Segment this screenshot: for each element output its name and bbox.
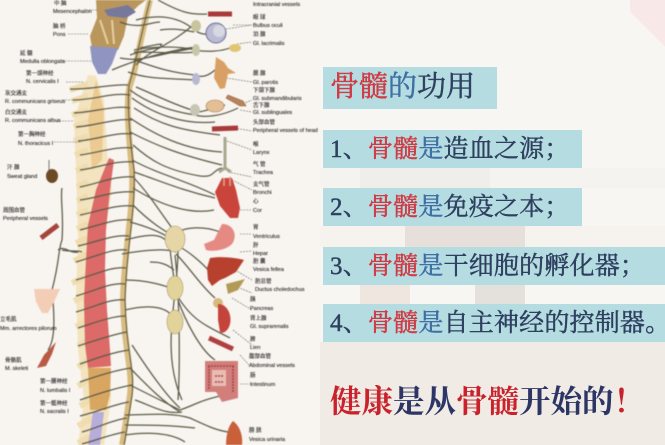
- right anatomical labels: 泪 腺: [253, 30, 266, 38]
- right anatomical labels: 头部血管: [253, 118, 276, 126]
- icon: eyeball: [191, 20, 226, 43]
- right anatomical labels: Vesica urinaria: [249, 437, 286, 443]
- left anatomical labels: R. communicans griseus: [5, 99, 65, 105]
- left anatomical labels: Sweat gland: [7, 174, 37, 180]
- right anatomical labels: 肾上腺: [250, 314, 267, 322]
- right anatomical labels: Ventriculus: [253, 234, 280, 240]
- icon: intracranial vessel: [208, 12, 232, 16]
- right anatomical labels: Cor: [253, 208, 262, 214]
- icon: larynx and trachea: [219, 137, 231, 172]
- right anatomical labels: Trachea: [253, 170, 274, 176]
- icon: peripheral vessel: [41, 225, 58, 238]
- heading: functions of bone marrow: 骨髓的功用: [330, 71, 475, 103]
- sympathetic chain: [122, 0, 150, 445]
- icon: ganglion: [167, 310, 183, 334]
- anatomical diagram: spinal cord and autonomic nerves: [0, 0, 318, 445]
- right anatomical labels: Intracranial vessels: [253, 2, 300, 8]
- right anatomical labels: 胃: [253, 224, 259, 231]
- right anatomical labels: Gl. submandibularis: [253, 96, 302, 102]
- heading: functions of bone marrow: [323, 67, 497, 109]
- right anatomical labels: Gl. sublinguales: [253, 110, 292, 116]
- right anatomical labels: Bulbus oculi: [253, 23, 283, 29]
- right anatomical labels: 喉: [253, 140, 259, 148]
- list item 3: [323, 247, 665, 285]
- list item 3: 3、骨髓是干细胞的孵化器；: [330, 253, 645, 280]
- icon: ganglion: [167, 276, 183, 300]
- icon: sweat gland: [46, 160, 58, 183]
- right anatomical labels: 肝: [253, 242, 259, 249]
- right anatomical labels: 眼 球: [253, 13, 266, 21]
- left anatomical labels: 第一腰神经: [40, 377, 68, 385]
- left anatomical labels: 白交通支: [5, 108, 28, 116]
- left anatomical labels: R. communicans albus: [5, 118, 61, 124]
- list item 4: 4、骨髓是自主神经的控制器。: [330, 310, 665, 337]
- icon: heart: [215, 177, 240, 218]
- right anatomical labels: 下颌下腺: [253, 86, 276, 94]
- brainstem: [90, 0, 146, 74]
- icon: salivary glands: [190, 95, 246, 116]
- list item 4: [323, 304, 665, 342]
- right anatomical labels: 舌下腺: [253, 101, 270, 109]
- list item 2: 2、骨髓是免疫之本；: [330, 194, 570, 221]
- spinal cord: lower tan segment: [88, 368, 111, 410]
- list item 1: [323, 130, 582, 168]
- left anatomical labels: N. cervicalis I: [26, 79, 59, 85]
- left anatomical labels: 第一骶神经: [40, 399, 68, 407]
- left anatomical labels: Mesencephalon: [53, 9, 92, 15]
- right anatomical labels: [249, 2, 318, 443]
- right anatomical labels: 心: [253, 198, 259, 205]
- right anatomical labels: Abdominal vessels: [249, 363, 295, 369]
- right anatomical labels: Larynx: [253, 150, 270, 156]
- icon: celiac ganglion: [165, 226, 185, 252]
- right anatomical labels: Lien: [250, 345, 260, 351]
- left anatomical labels: 汗 腺: [7, 163, 20, 171]
- left anatomical labels: 周围血管: [3, 206, 26, 214]
- right anatomical labels: 膀 胱: [249, 426, 262, 434]
- left anatomical labels: 第一颈神经: [26, 69, 54, 77]
- left anatomical labels: 第一胸神经: [18, 130, 46, 138]
- icon: head vessels: [212, 128, 238, 129]
- left anatomical labels: M. skeleti: [5, 366, 28, 372]
- icon: bladder: [226, 421, 242, 445]
- closing statement: 健康是从骨髓开始的！: [330, 384, 645, 419]
- left anatomical labels: Pons: [53, 32, 66, 38]
- left anatomical labels: 延 髓: [20, 49, 33, 57]
- left anatomical labels: Peripheral vessels: [3, 216, 48, 222]
- right anatomical labels: 胰: [250, 295, 256, 303]
- icon: stomach: [204, 224, 235, 251]
- vertebral column: [70, 75, 112, 445]
- left anatomical labels: 立毛肌: [0, 315, 17, 323]
- right anatomical labels: Hepar: [253, 251, 268, 257]
- icon: muscle: [37, 342, 56, 368]
- icon: lacrimal gland: [192, 44, 241, 56]
- right anatomical labels: 气 管: [253, 160, 266, 168]
- icon: spleen: [209, 338, 233, 349]
- right anatomical labels: 脾: [250, 335, 256, 343]
- right anatomical labels: Vesica fellea: [253, 267, 285, 273]
- right anatomical labels: 胆 囊: [253, 257, 266, 265]
- right anatomical labels: 腮 腺: [253, 69, 266, 77]
- right anatomical labels: Pancreas: [250, 306, 273, 312]
- right anatomical labels: 支气管: [253, 180, 270, 188]
- right anatomical labels: Gl. suprarenalis: [250, 324, 289, 330]
- left anatomical labels: 中 脑: [54, 0, 67, 7]
- icon: kidney: [213, 298, 230, 333]
- spinal cord: red segment: [84, 158, 114, 368]
- icon: intestine: [205, 361, 238, 402]
- right anatomical labels: 胆总管: [255, 277, 272, 285]
- right anatomical labels: Gl. lacrimalis: [253, 41, 285, 47]
- right anatomical labels: Bronchi: [253, 190, 272, 196]
- icon: parotid gland: [192, 57, 236, 89]
- right anatomical labels: 腹部血管: [249, 352, 272, 360]
- left anatomical labels: Medulla oblongata: [20, 59, 66, 65]
- nerves: [48, 0, 238, 445]
- left anatomical labels: N. lumbalis I: [40, 388, 71, 394]
- left anatomical labels: N. thoracicus I: [18, 141, 54, 147]
- right anatomical labels: Intestinum: [250, 382, 276, 388]
- left anatomical labels: 脑 桥: [53, 22, 66, 30]
- icon: liver and gallbladder: [207, 257, 245, 294]
- right anatomical labels: Gl. parotis: [253, 80, 278, 86]
- leader lines: [54, 10, 252, 384]
- left anatomical labels: N. sacralis I: [40, 409, 69, 415]
- faded background pattern: [320, 0, 665, 445]
- right anatomical labels: Ductus choledochus: [255, 287, 305, 293]
- right anatomical labels: Peripheral vessels of head: [253, 128, 318, 134]
- left anatomical labels: 骨骼肌: [5, 356, 22, 364]
- left anatomical labels: 灰交通支: [5, 89, 28, 97]
- left anatomical labels: [0, 0, 92, 415]
- left anatomical labels: Mm. arrectores pilorum: [0, 326, 57, 332]
- icon: skin section: [34, 289, 60, 313]
- right anatomical labels: 肠: [250, 371, 256, 379]
- cauda equina: [88, 412, 104, 445]
- list item 2: [323, 188, 582, 226]
- list item 1: 1、骨髓是造血之源；: [330, 136, 570, 163]
